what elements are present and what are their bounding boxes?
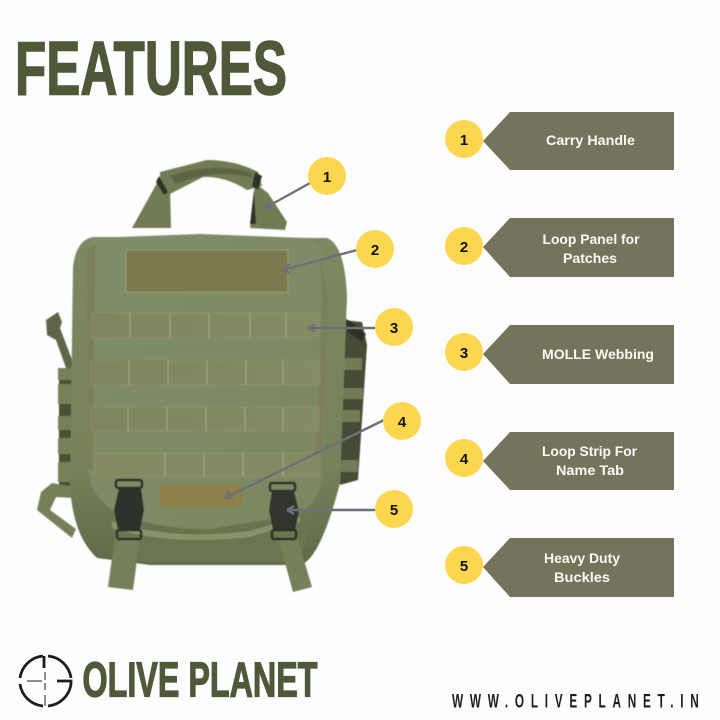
backpack illustration — [37, 160, 367, 592]
callout badge 5 on bag: 5 — [390, 502, 398, 519]
feature 2: loop panel for patches — [445, 218, 674, 277]
callout badge 5 on bag — [375, 490, 413, 528]
brand name: OLIVE PLANET — [82, 654, 318, 708]
feature 1: carry handle: Carry Handle — [546, 133, 636, 148]
feature 4: loop strip for name tab: Loop Strip For — [542, 444, 638, 459]
callout badge 1 on bag: 1 — [323, 169, 331, 186]
callout badge 3 on bag — [375, 308, 413, 346]
carry handle — [132, 160, 287, 230]
right side webbing — [338, 318, 367, 485]
buckle straps — [108, 537, 312, 592]
arrow 1 — [265, 183, 310, 208]
left side webbing — [58, 368, 75, 486]
loop panel patch — [126, 250, 288, 292]
feature 1: carry handle — [445, 112, 674, 170]
bag body — [70, 237, 347, 565]
feature 1: carry handle: 1 — [460, 132, 468, 149]
lower pocket — [112, 510, 315, 562]
callout badge 4 on bag: 4 — [398, 414, 407, 431]
feature 2: loop panel for patches: Patches — [563, 251, 617, 266]
arrow 5 — [287, 506, 375, 514]
feature 3: MOLLE webbing: 3 — [460, 345, 468, 362]
lower left strap — [37, 483, 76, 538]
left shoulder strap — [46, 312, 74, 372]
feature 4: loop strip for name tab — [445, 432, 674, 490]
left buckle — [114, 480, 144, 539]
callout badge 4 on bag — [383, 402, 421, 440]
feature 3: MOLLE webbing — [445, 325, 674, 384]
callout badge 2 on bag — [356, 230, 394, 268]
front flap — [88, 234, 330, 529]
title: FEATURES — [15, 26, 287, 112]
feature 5: heavy duty buckles — [445, 538, 674, 597]
arrow 3 — [308, 324, 375, 332]
feature 2: loop panel for patches: 2 — [460, 239, 468, 256]
right buckle — [269, 483, 299, 539]
callout badge 2 on bag: 2 — [371, 242, 379, 259]
name tab loop strip — [160, 485, 242, 507]
flap side seams — [87, 245, 329, 475]
logo crosshair icon — [20, 656, 71, 706]
feature 5: heavy duty buckles: 5 — [460, 558, 468, 575]
feature 3: MOLLE webbing: MOLLE Webbing — [542, 347, 654, 362]
callout badge 3 on bag: 3 — [390, 320, 398, 337]
arrow 2 — [283, 250, 357, 273]
feature 4: loop strip for name tab: Name Tab — [556, 463, 624, 478]
feature 4: loop strip for name tab: 4 — [460, 451, 469, 468]
leader lines — [225, 183, 384, 514]
callout badge 1 on bag — [308, 157, 346, 195]
website url: WWW.OLIVEPLANET.IN — [452, 692, 699, 712]
feature 5: heavy duty buckles: Buckles — [554, 570, 610, 585]
MOLLE webbing rows — [91, 313, 320, 477]
feature 2: loop panel for patches: Loop Panel for — [542, 232, 640, 247]
arrow 4 — [225, 420, 384, 498]
feature 5: heavy duty buckles: Heavy Duty — [544, 551, 620, 566]
